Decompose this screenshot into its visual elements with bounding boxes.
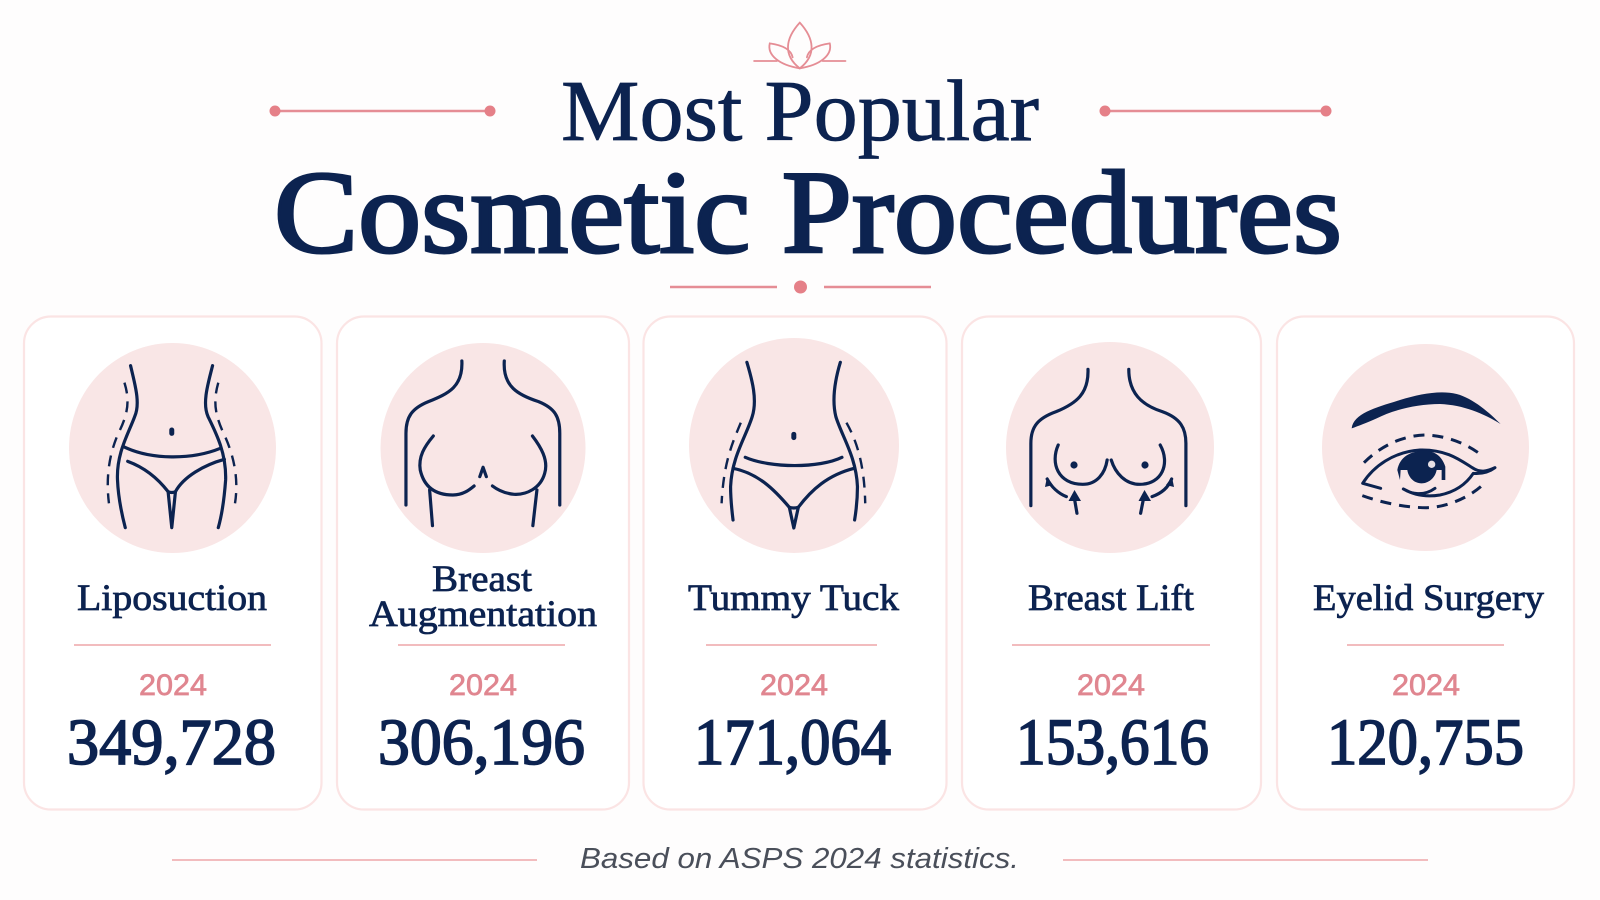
icon: tummy tuck abdomen: [689, 338, 899, 553]
divider: [398, 644, 565, 646]
divider: [1012, 644, 1210, 646]
footer note: Based on ASPS 2024 statistics.: [580, 843, 1019, 875]
label: Augmentation: [369, 594, 597, 635]
label: Tummy Tuck: [688, 578, 900, 619]
footer rule right: [1063, 859, 1428, 861]
number: 171,064: [694, 706, 891, 779]
title divider: [670, 280, 931, 294]
icon: breast lift torso with arrows: [1006, 342, 1214, 553]
label: [369, 559, 597, 635]
icon: eye and eyebrow: [1322, 344, 1529, 551]
year: 2024: [449, 669, 517, 702]
panel: breast augmentation: [337, 316, 629, 810]
divider: [706, 644, 877, 646]
divider: [74, 644, 271, 646]
label: Liposuction: [77, 578, 267, 619]
year: 2024: [1077, 669, 1145, 702]
panel: liposuction: [24, 316, 322, 810]
icon: breast augmentation torso: [380, 343, 586, 553]
icon: liposuction waist: [69, 343, 276, 553]
divider: [1347, 644, 1504, 646]
number: 153,616: [1016, 706, 1209, 779]
decorative line: title right: [1100, 106, 1332, 116]
year: 2024: [139, 669, 207, 702]
footer rule left: [172, 859, 537, 861]
title: Most Popular: [561, 62, 1039, 159]
title: [274, 62, 1342, 278]
year: 2024: [760, 669, 828, 702]
number: 120,755: [1327, 706, 1524, 779]
panel: eyelid surgery: [1277, 316, 1574, 810]
panel: breast lift: [962, 316, 1261, 810]
year: 2024: [1392, 669, 1460, 702]
label: Eyelid Surgery: [1313, 578, 1545, 619]
label: Breast: [432, 559, 533, 600]
title: Cosmetic Procedures: [274, 147, 1342, 278]
decorative line: title left: [270, 106, 496, 116]
panel: tummy tuck: [644, 316, 946, 810]
label: Breast Lift: [1028, 578, 1195, 619]
number: 306,196: [378, 706, 585, 779]
number: 349,728: [67, 706, 276, 779]
icon: lotus ornament: [754, 23, 845, 68]
